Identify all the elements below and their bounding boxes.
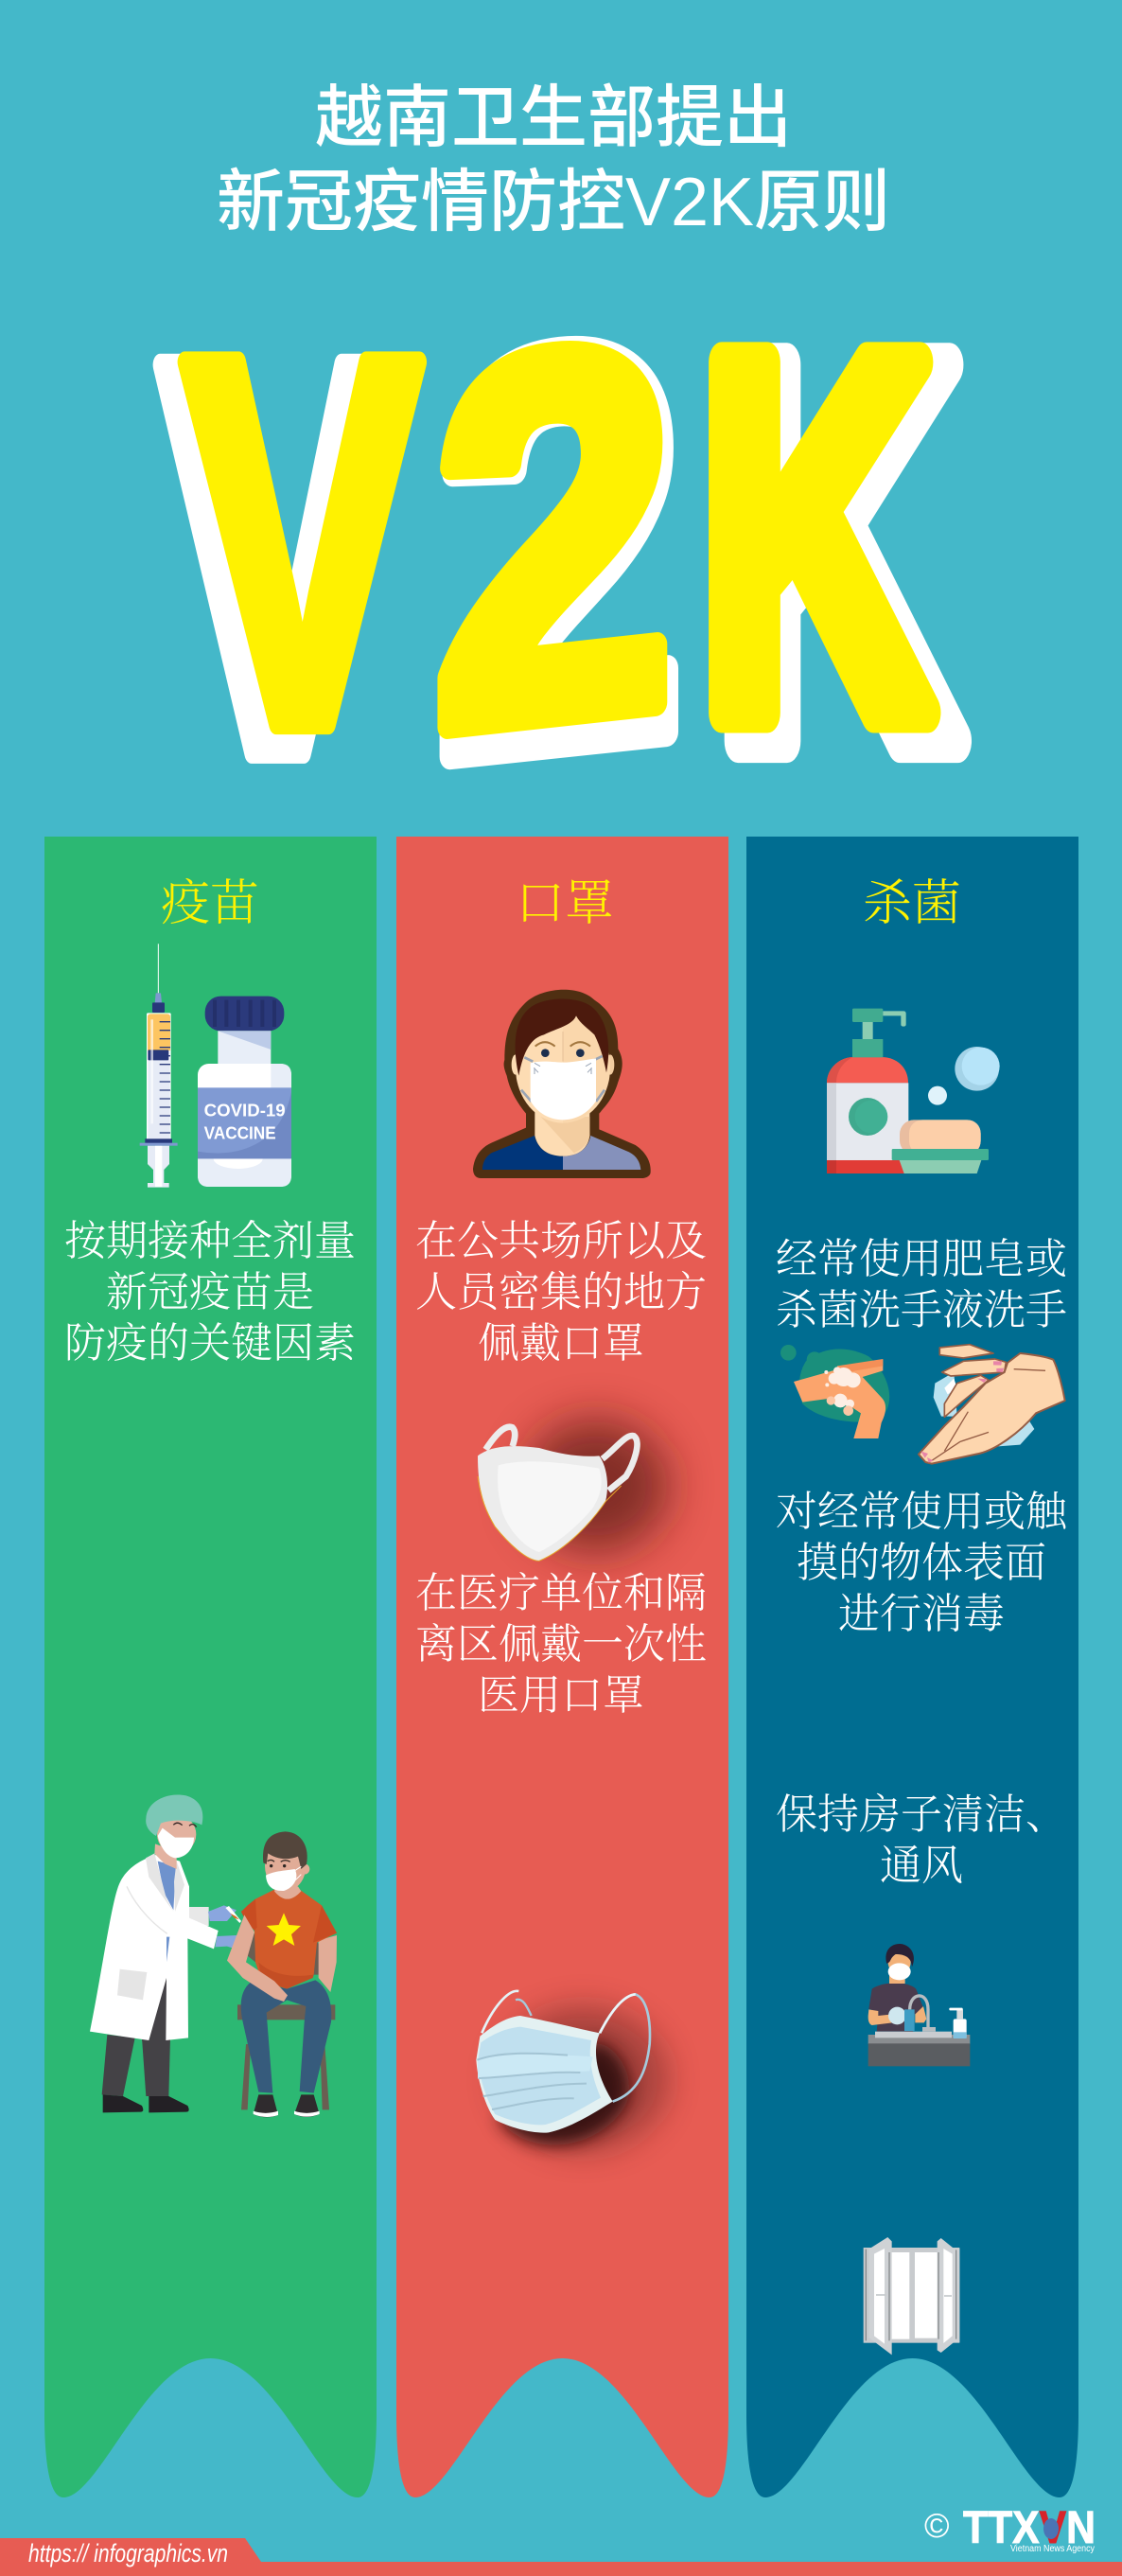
icon: syringe and vaccine vial: COVID-19 [204, 1100, 286, 1120]
big V2K lettering: 2 [435, 222, 685, 877]
panel: disinfection [746, 837, 1078, 2497]
illustration: doctor vaccinating patient [90, 1794, 337, 2117]
text: disinfect surfaces advice: 对经常使用或触 [776, 1489, 1068, 1535]
big V2K lettering: K [700, 253, 931, 821]
title: 越南卫生部提出 [315, 80, 792, 156]
logo: TTXVN copyright: Vietnam News Agency [1010, 2544, 1095, 2554]
text: vaccination advice: 防疫的关键因素 [64, 1320, 356, 1367]
text: mask advice in medical facilities [415, 1570, 707, 1719]
text: vaccination advice [64, 1218, 356, 1367]
text: disinfect surfaces advice: 摸的物体表面 [797, 1540, 1046, 1586]
icon: open window [864, 2237, 959, 2355]
icon: white KN95 mask [478, 1420, 669, 1561]
heading: masks: 口罩 [516, 877, 614, 931]
big V2K lettering [158, 222, 961, 877]
heading: disinfection: 杀菌 [863, 877, 961, 931]
logo: TTXVN copyright: TTXVN [963, 2503, 1096, 2553]
text: keep house clean advice: 通风 [880, 1843, 963, 1889]
icon: surgical mask [476, 1991, 669, 2151]
logo: TTXVN copyright: © [924, 2506, 950, 2545]
big V2K lettering: 2 [433, 235, 674, 838]
text: mask advice in medical facilities: 离区佩戴一次性 [415, 1621, 707, 1667]
title: 新冠疫情防控V2K原则 [217, 165, 890, 240]
text: wash hands advice [776, 1236, 1067, 1333]
red ribbon [396, 837, 728, 2497]
text: mask advice in medical facilities: 医用口罩 [478, 1672, 644, 1719]
illustration: man washing hands at sink [868, 1944, 970, 2066]
text: wash hands advice: 经常使用肥皂或 [776, 1236, 1067, 1282]
text: disinfect surfaces advice [776, 1489, 1068, 1637]
big V2K lettering: V [158, 242, 399, 872]
text: vaccination advice: 新冠疫苗是 [106, 1269, 314, 1315]
text: mask advice in public: 佩戴口罩 [478, 1320, 644, 1367]
text: keep house clean advice [776, 1791, 1067, 1889]
icon: syringe and vaccine vial: VACCINE [204, 1123, 276, 1143]
text: vaccination advice: 按期接种全剂量 [64, 1218, 356, 1264]
text: mask advice in public: 在公共场所以及 [415, 1218, 707, 1264]
icon: soap bottle, soap bar and bubbles [827, 1009, 1000, 1173]
text: disinfect surfaces advice: 进行消毒 [838, 1591, 1005, 1637]
panel: masks [396, 837, 728, 2497]
heading: vaccine: 疫苗 [161, 877, 259, 931]
panel: vaccine [44, 837, 377, 2497]
icon: syringe and vaccine vial [140, 944, 291, 1188]
blue ribbon [746, 837, 1078, 2497]
url text: https:// infographics.vn [28, 2539, 228, 2567]
footer band [0, 2538, 1122, 2576]
text: wash hands advice: 杀菌洗手液洗手 [776, 1287, 1067, 1333]
text: mask advice in medical facilities: 在医疗单位和隔 [415, 1570, 707, 1616]
big V2K lettering: V [183, 248, 424, 836]
icon: person wearing mask [473, 990, 651, 1178]
title [217, 80, 890, 240]
illustration: hands washing [780, 1345, 1065, 1464]
text: mask advice in public: 人员密集的地方 [415, 1269, 707, 1315]
big V2K lettering: K [715, 247, 961, 858]
text: mask advice in public [415, 1218, 707, 1367]
url tab [0, 2538, 1122, 2576]
green ribbon [44, 837, 377, 2497]
text: keep house clean advice: 保持房子清洁、 [776, 1791, 1067, 1838]
